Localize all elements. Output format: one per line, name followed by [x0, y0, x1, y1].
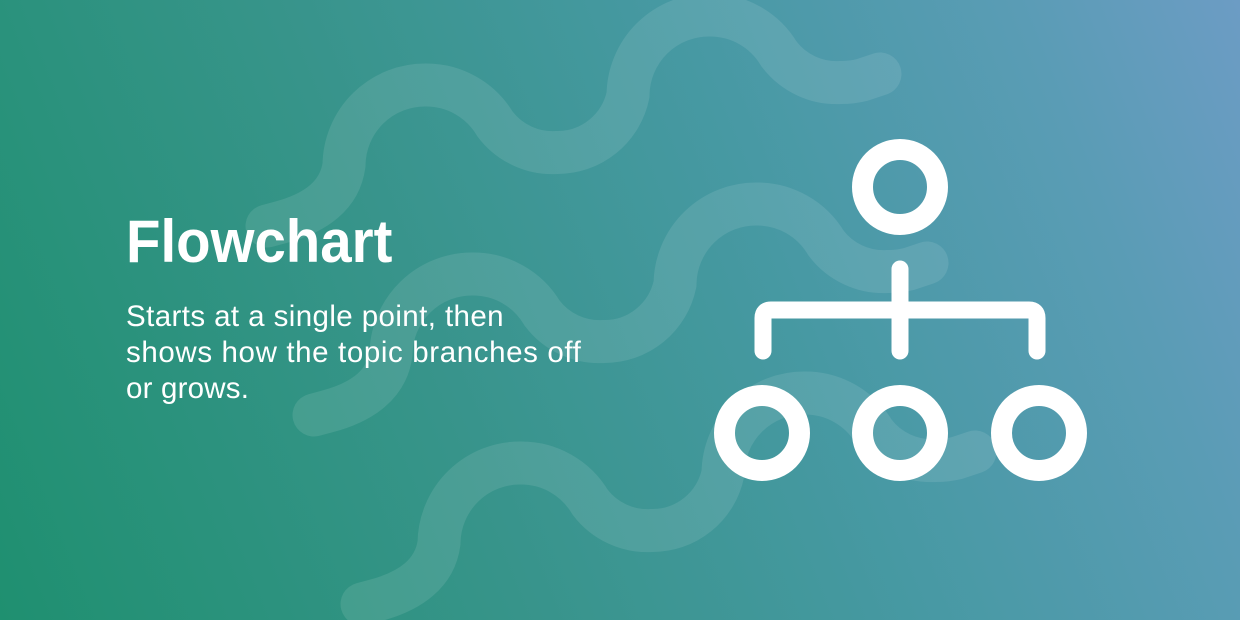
icon: flowchart hierarchy: [724, 150, 1076, 470]
decorative wavy bands: [267, 15, 975, 604]
description text: Starts at a single point, then: [126, 300, 504, 333]
description text: shows how the topic branches off: [126, 336, 582, 369]
icon: bottom right node: [1002, 396, 1076, 470]
icon: bottom left node: [724, 396, 800, 470]
icon: bottom middle node: [862, 396, 938, 470]
icon: top node: [862, 150, 938, 224]
icon: connector lines: [763, 269, 1037, 351]
description text: or grows.: [126, 372, 249, 405]
title: Flowchart: [126, 208, 392, 275]
description text: [126, 300, 582, 405]
